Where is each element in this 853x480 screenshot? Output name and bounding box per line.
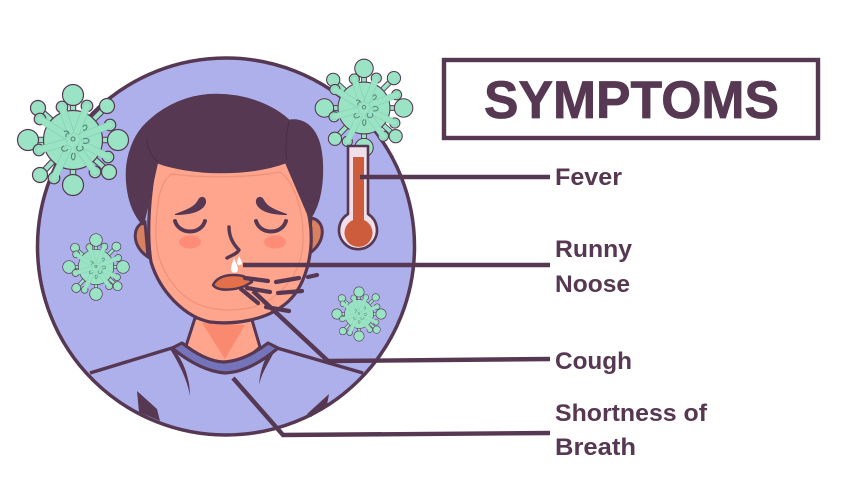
callout: runny nose	[243, 236, 633, 298]
callout: shortness of breath: Breath	[555, 434, 636, 461]
runny drops	[231, 256, 242, 273]
callout: shortness of breath	[233, 378, 708, 461]
cough dashes	[241, 275, 317, 311]
virus: lower right	[332, 287, 386, 341]
collar	[172, 343, 278, 373]
neck	[186, 318, 260, 363]
callout: fever: Fever	[555, 164, 622, 191]
callout: shortness of breath: Shortness of	[555, 400, 708, 427]
face inner contour	[156, 172, 303, 310]
mouth	[213, 275, 252, 290]
nose	[227, 227, 239, 258]
callout: runny nose: Runny	[555, 236, 633, 263]
virus: top left	[18, 84, 128, 196]
callout: cough	[253, 291, 632, 375]
cheeks	[179, 236, 286, 248]
title box: SYMPTOMS	[484, 71, 779, 130]
hair highlights	[147, 122, 289, 162]
virus: top right	[315, 59, 413, 157]
eyes	[175, 221, 286, 232]
callout: cough: Cough	[555, 348, 632, 375]
virus: mid left	[63, 234, 129, 300]
face	[149, 160, 311, 323]
thermometer icon	[339, 146, 377, 249]
ears	[135, 222, 148, 257]
shirt	[90, 348, 363, 421]
person illustration	[90, 95, 363, 421]
hair	[127, 95, 322, 224]
callout: runny nose: Noose	[555, 271, 630, 298]
eyebrows	[175, 197, 287, 215]
title box	[444, 60, 818, 138]
background circle	[38, 58, 414, 435]
